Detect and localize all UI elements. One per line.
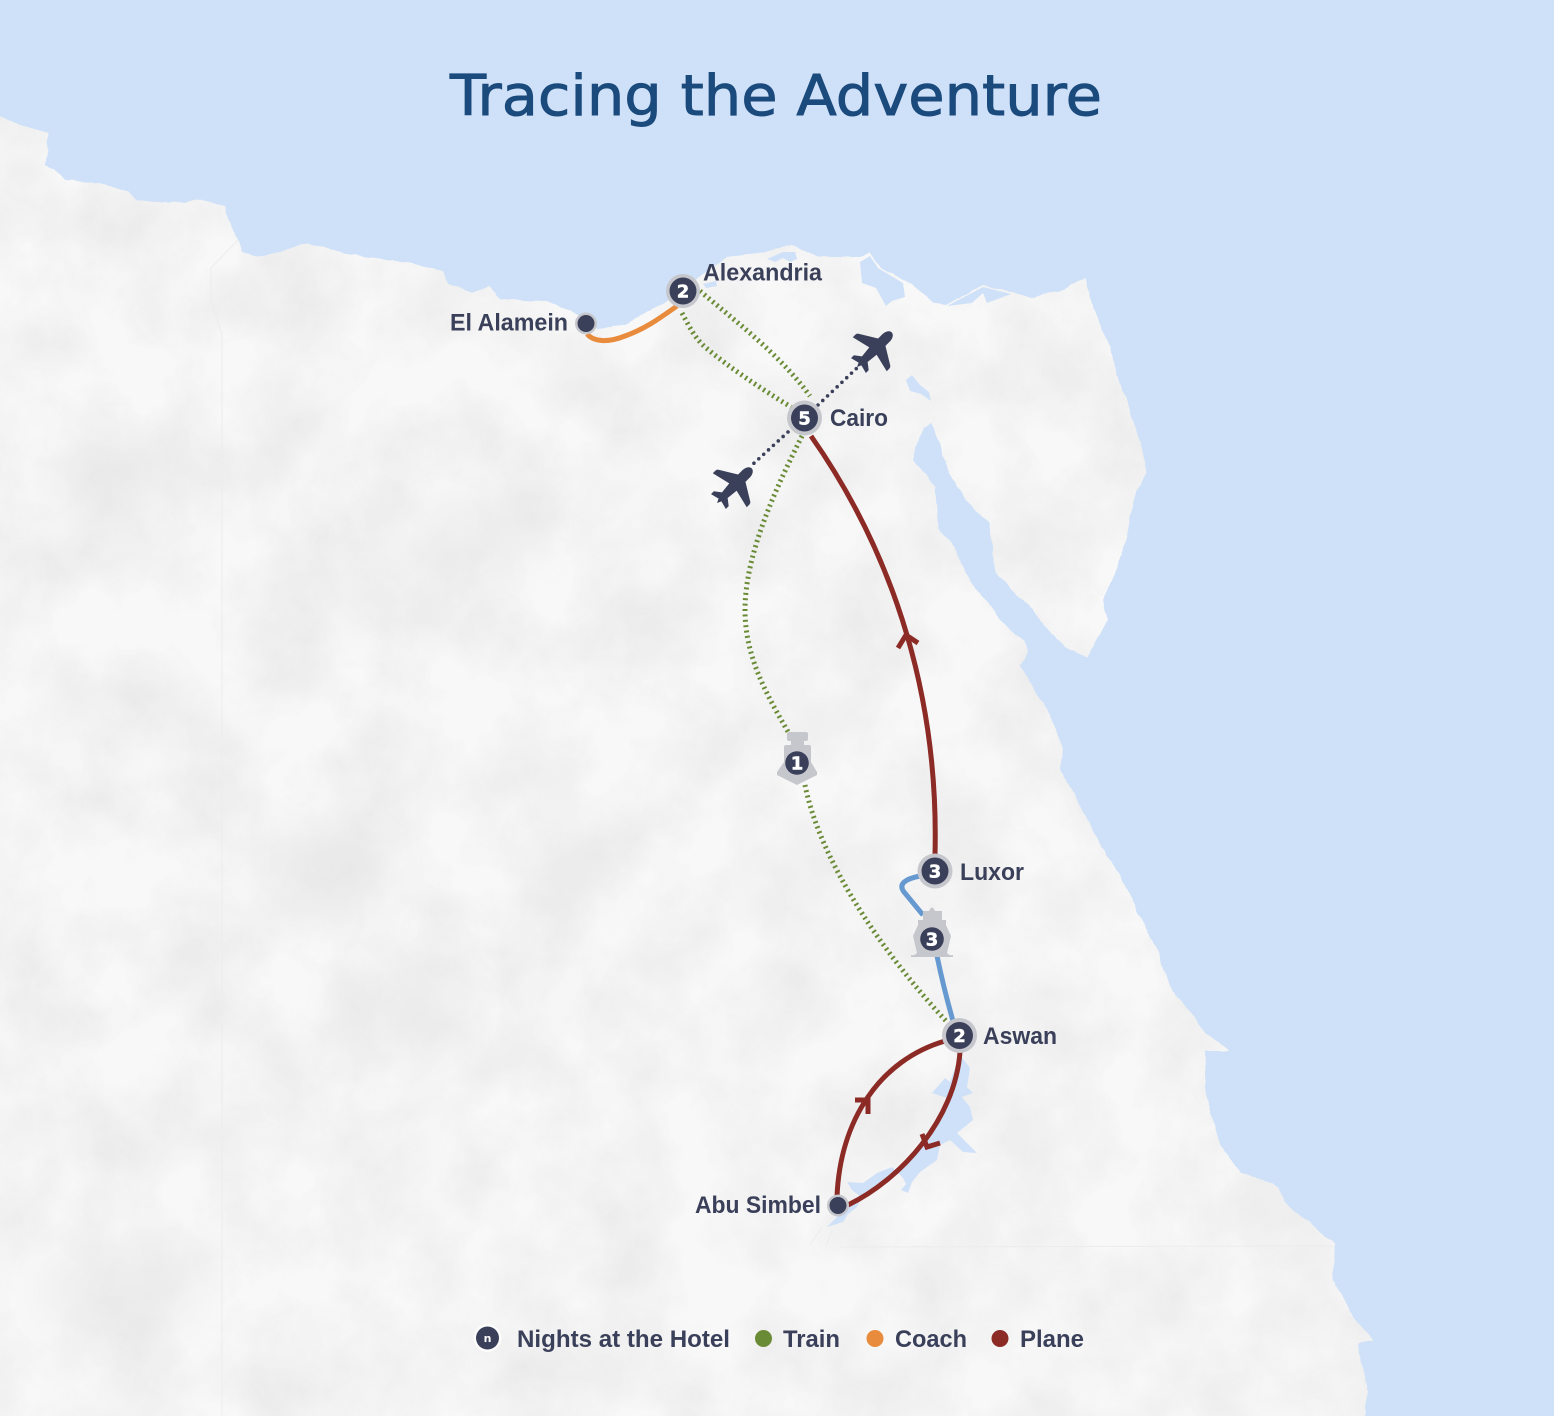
icon: Nile ship with 3 nights: [911, 908, 953, 957]
legend: nights at the hotel: Nights at the Hotel: [517, 1326, 730, 1353]
stop: Luxor, 3 nights: 3: [929, 862, 941, 882]
route: plane Abu Simbel to Aswan: [837, 1041, 945, 1197]
stop: Cairo, 5 nights: 5: [798, 408, 811, 430]
legend: [474, 1324, 1084, 1353]
icon: Nile ship with 1 night: [777, 732, 817, 785]
icon: plane north: [840, 315, 909, 384]
faint borders: [211, 240, 1335, 1416]
legend: plane: [992, 1326, 1084, 1353]
stop: Cairo, 5 nights: Cairo: [830, 405, 888, 432]
international flight, north dotted line: [818, 367, 858, 405]
legend: train: Train: [783, 1326, 840, 1353]
stop: Alexandria, 2 nights: [666, 260, 823, 308]
stop: Aswan, 2 nights: [942, 1018, 1057, 1053]
route: coach El Alamein to Alexandria: [587, 306, 677, 341]
arrowhead: [855, 1100, 868, 1114]
icon: plane south: [700, 451, 769, 520]
arrowhead: [898, 635, 918, 648]
legend: plane: Plane: [1020, 1326, 1084, 1353]
stop: Aswan, 2 nights: Aswan: [983, 1023, 1057, 1050]
stop: El Alamein: El Alamein: [450, 310, 568, 336]
stop: Cairo, 5 nights: [787, 400, 888, 436]
route: train Alexandria to Cairo, north: [700, 291, 810, 396]
icon: Nile ship with 1 night: 1: [791, 754, 803, 774]
stop: Luxor, 3 nights: Luxor: [960, 859, 1024, 886]
stop: Abu Simbel: Abu Simbel: [695, 1192, 821, 1219]
route: train Alexandria to Cairo, south: [682, 313, 791, 407]
international flight, south dotted line: [752, 432, 788, 465]
route: train Nile ship to Aswan: [805, 785, 947, 1022]
route: plane Luxor to Cairo: [811, 436, 935, 855]
stop: Alexandria, 2 nights: 2: [677, 282, 689, 302]
stop: Aswan, 2 nights: 2: [953, 1026, 966, 1047]
legend: train: [755, 1326, 840, 1353]
stop: Alexandria, 2 nights: Alexandria: [703, 260, 823, 286]
Med lakes, gulf islands and Lake Nasser: [703, 252, 1134, 1227]
route: Nile cruise Luxor to Aswan: [902, 876, 953, 1021]
icon: Nile ship with 3 nights: 3: [926, 930, 938, 950]
arrowhead: [922, 1134, 940, 1147]
route: plane Aswan to Abu Simbel: [848, 1052, 960, 1205]
title: Tracing the Adventure: [449, 64, 1102, 129]
legend: coach: Coach: [895, 1326, 967, 1353]
shaded terrain patches: [40, 440, 610, 1340]
stop: Luxor, 3 nights: [918, 854, 1024, 888]
route: train Cairo to Nile ship: [745, 436, 802, 737]
legend: nights at the hotel: n: [484, 1332, 491, 1345]
